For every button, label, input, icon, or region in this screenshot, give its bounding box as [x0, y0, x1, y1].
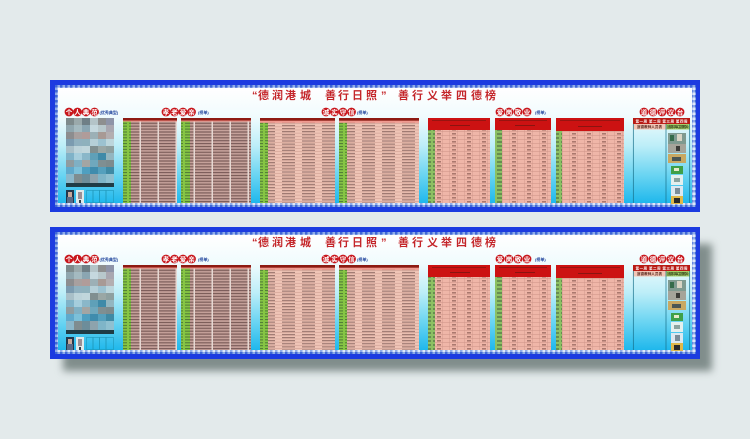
heading: 个人典范: (优秀典型): [100, 109, 119, 115]
title: “德润港城善行日照”善行义举四德榜: [252, 235, 496, 249]
board: lower display: [50, 227, 700, 359]
mosaic portrait: [66, 118, 114, 187]
photo strip: [668, 280, 686, 351]
heading: 诚实守信: 诚: [323, 254, 330, 263]
table 4: [339, 118, 419, 203]
heading: 诚实守信: 实: [331, 254, 338, 263]
heading: 爱岗敬业: 敬: [515, 254, 522, 263]
heading: 爱岗敬业: 敬: [515, 107, 522, 116]
heading: 个人典范: 范: [91, 107, 98, 116]
heading: 诚实守信: 实: [331, 107, 338, 116]
heading: 孝老爱亲: 爱: [180, 107, 187, 116]
table 5: [428, 118, 490, 203]
panel: review board: 第一周 第二周 第三周 第四周: [636, 118, 688, 123]
heading: 个人典范: 典: [83, 254, 90, 263]
table 3: [260, 265, 335, 350]
heading: 诚实守信: 信: [348, 107, 355, 116]
heading: 诚实守信: 守: [340, 107, 347, 116]
panel: review board: 道德评审主题照片: [667, 271, 689, 276]
shadow of lower board: [63, 244, 712, 371]
mosaic portrait: [66, 265, 114, 334]
board frame: [50, 227, 700, 359]
panel: review board: 道德教师人员表: [637, 124, 662, 129]
heading: 道德评议台: 道: [641, 254, 648, 263]
heading: 道德评议台: 评: [659, 107, 666, 116]
heading: 孝老爱亲: [162, 107, 209, 116]
heading: 道德评议台: 道: [641, 107, 648, 116]
heading: 孝老爱亲: 老: [171, 254, 178, 263]
table 5: [428, 265, 490, 350]
heading: 孝老爱亲: (榜单): [198, 256, 209, 262]
heading: 孝老爱亲: 亲: [188, 107, 195, 116]
table 6: [495, 265, 551, 350]
heading: 道德评议台: 评: [659, 254, 666, 263]
heading: 个人典范: 人: [74, 108, 81, 116]
heading: 爱岗敬业: 爱: [497, 107, 504, 116]
heading: 爱岗敬业: 爱: [497, 254, 504, 263]
panel: review board: [633, 265, 690, 351]
heading: 孝老爱亲: 孝: [163, 107, 170, 116]
heading: 爱岗敬业: [496, 254, 546, 263]
panel: review board: [633, 118, 690, 204]
heading: 个人典范: 人: [74, 255, 81, 263]
heading: 诚实守信: [322, 254, 368, 263]
table 2: [181, 118, 251, 203]
heading: 诚实守信: 守: [340, 254, 347, 263]
table 2: [181, 265, 251, 350]
heading: 爱岗敬业: (榜单): [535, 256, 546, 262]
heading: 个人典范: 典: [83, 107, 90, 116]
table 1: [123, 265, 177, 350]
panel: review board: 道德教师人员表: [637, 271, 662, 276]
heading: 诚实守信: (榜单): [357, 256, 368, 262]
heading: 道德评议台: [640, 254, 684, 263]
heading: 道德评议台: 台: [677, 254, 684, 263]
heading: 道德评议台: [640, 107, 684, 116]
heading: 个人典范: (优秀典型): [100, 256, 119, 262]
heading: 孝老爱亲: 亲: [188, 254, 195, 263]
heading: 个人典范: 个: [66, 108, 73, 116]
heading: 爱岗敬业: 业: [524, 107, 531, 116]
heading: 道德评议台: 德: [650, 107, 657, 116]
panel: review board: 道德评审主题照片: [667, 124, 689, 129]
heading: 个人典范: [65, 107, 119, 116]
heading: 爱岗敬业: 业: [524, 254, 531, 263]
heading: 个人典范: 范: [91, 254, 98, 263]
heading: 孝老爱亲: (榜单): [198, 109, 209, 115]
heading: 孝老爱亲: 老: [171, 107, 178, 116]
heading: 道德评议台: 台: [677, 107, 684, 116]
photo strip: [668, 133, 686, 204]
table 4: [339, 265, 419, 350]
table 1: [123, 118, 177, 203]
heading: 个人典范: 个: [66, 255, 73, 263]
heading: 道德评议台: 议: [668, 107, 675, 116]
heading: 孝老爱亲: [162, 254, 209, 263]
heading: 诚实守信: [322, 107, 368, 116]
heading: 爱岗敬业: [496, 107, 546, 116]
heading: 道德评议台: 德: [650, 254, 657, 263]
heading: 爱岗敬业: 岗: [506, 108, 512, 116]
board: upper display: [50, 80, 700, 212]
board frame: [50, 80, 700, 212]
heading: 道德评议台: 议: [668, 254, 675, 263]
table 6: [495, 118, 551, 203]
panel: review board: 第一周 第二周 第三周 第四周: [636, 265, 688, 270]
portrait thumbnails: [66, 337, 114, 350]
heading: 诚实守信: 诚: [323, 107, 330, 116]
portrait thumbnails: [66, 190, 114, 203]
heading: 爱岗敬业: 岗: [506, 255, 512, 263]
table 7: [556, 265, 624, 350]
heading: 孝老爱亲: 爱: [180, 254, 187, 263]
heading: 个人典范: [65, 254, 119, 263]
heading: 爱岗敬业: (榜单): [535, 109, 546, 115]
heading: 诚实守信: (榜单): [357, 109, 368, 115]
heading: 孝老爱亲: 孝: [163, 254, 170, 263]
table 3: [260, 118, 335, 203]
title: “德润港城善行日照”善行义举四德榜: [252, 88, 496, 102]
heading: 诚实守信: 信: [348, 254, 355, 263]
table 7: [556, 118, 624, 203]
